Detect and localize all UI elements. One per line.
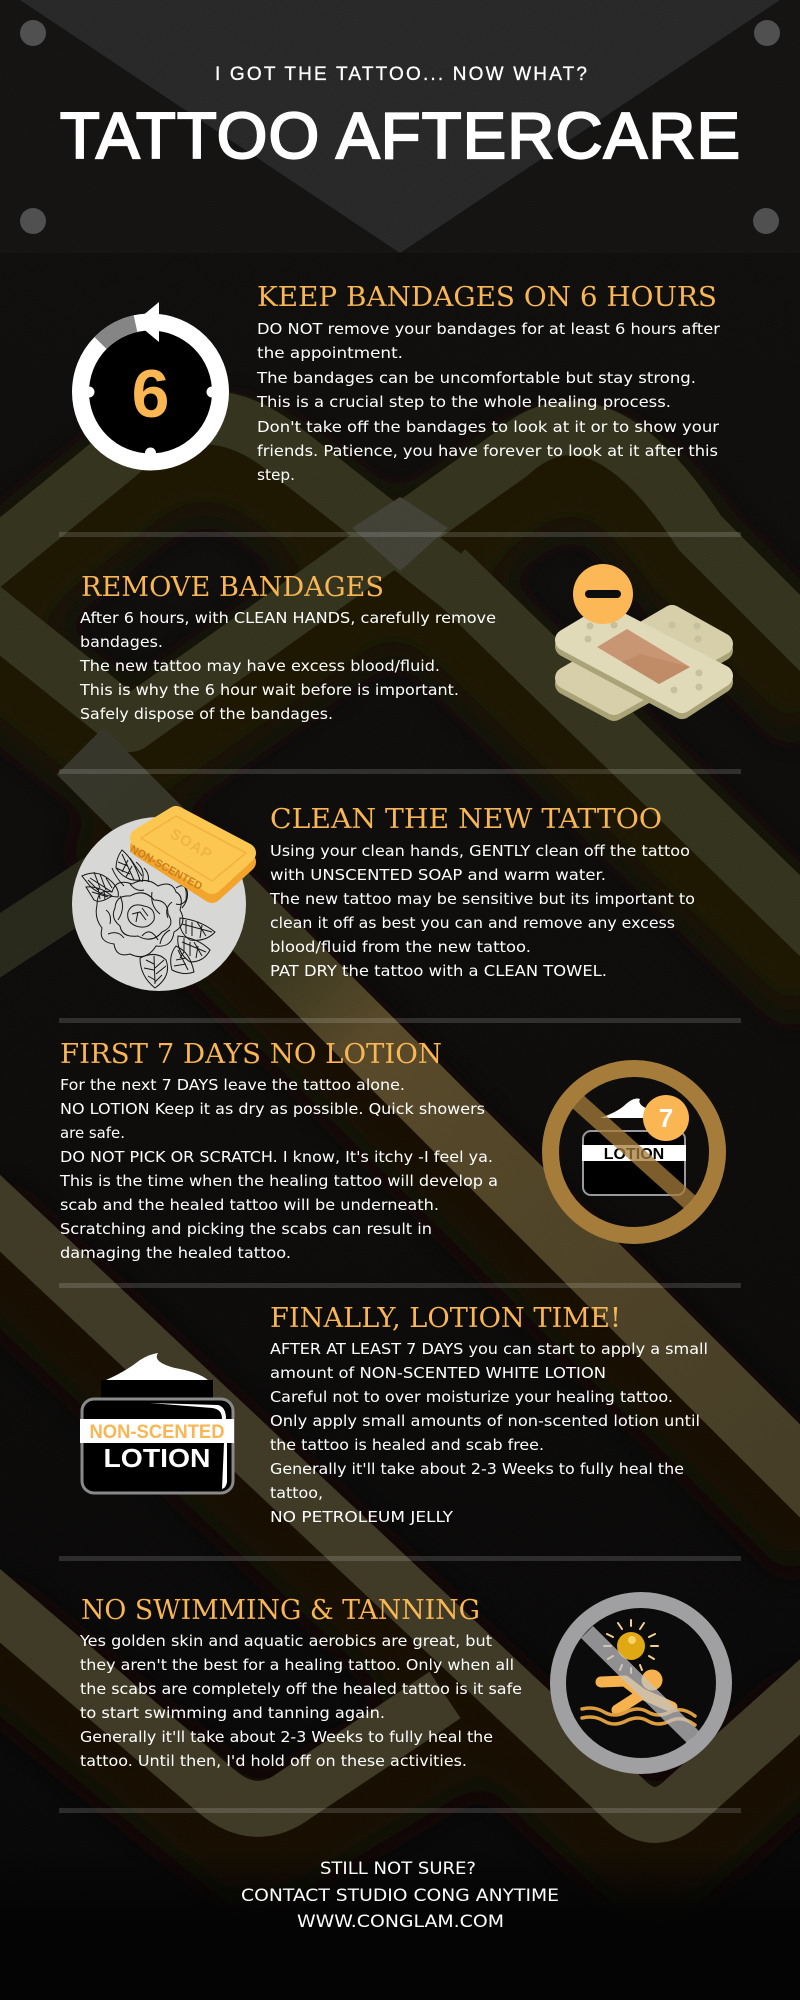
footer: contact text — [241, 1859, 559, 1932]
body text: Yes golden skin and aquatic aerobics are great, but — [79, 1632, 492, 1650]
body text: For the next 7 DAYS leave the tattoo alone. — [60, 1076, 405, 1094]
body text: NO PETROLEUM JELLY — [270, 1508, 454, 1526]
footer: contact text: CONTACT STUDIO CONG ANYTIME — [241, 1886, 559, 1906]
body text: are safe. — [60, 1124, 125, 1142]
body text: PAT DRY the tattoo with a CLEAN TOWEL. — [270, 962, 607, 980]
icon: no lotion sign — [550, 1068, 718, 1236]
body text: with UNSCENTED SOAP and warm water. — [270, 866, 606, 884]
body text: After 6 hours, with CLEAN HANDS, carefully remove — [80, 609, 496, 627]
heading: REMOVE BANDAGES — [81, 572, 384, 603]
body text: Don't take off the bandages to look at it or to show your — [257, 418, 720, 436]
divider — [59, 1018, 741, 1023]
heading: CLEAN THE NEW TATTOO — [270, 804, 662, 835]
icon: no lotion sign: LOTION — [604, 1146, 664, 1163]
body text: clean it off as best you can and remove any excess — [270, 914, 675, 932]
body text: to start swimming and tanning again. — [80, 1704, 385, 1722]
body text: friends. Patience, you have forever to look at it after this — [257, 442, 718, 460]
body text: Generally it'll take about 2-3 Weeks to fully heal the — [80, 1728, 493, 1746]
panel: no swimming and tanning — [79, 1595, 724, 1770]
icon: soap bar: SOAP — [167, 825, 216, 864]
heading: NO SWIMMING & TANNING — [81, 1595, 480, 1626]
body text: Using your clean hands, GENTLY clean off the tattoo — [270, 842, 690, 860]
body text: The bandages can be uncomfortable but stay strong. — [256, 369, 696, 387]
body text — [79, 609, 496, 723]
icon: crossed bandages — [566, 564, 722, 710]
icon: six hour clock: 6 — [132, 356, 169, 432]
body text: This is why the 6 hour wait before is important. — [79, 681, 459, 699]
icon: lotion jar — [80, 1353, 234, 1493]
body text: tattoo, — [270, 1484, 323, 1502]
icon: soap bar: NON-SCENTED — [128, 843, 204, 893]
body text: Generally it'll take about 2-3 Weeks to fully heal the — [270, 1460, 684, 1478]
heading: FINALLY, LOTION TIME! — [270, 1303, 621, 1334]
body text: the appointment. — [257, 344, 403, 362]
body text: The new tattoo may have excess blood/fluid. — [79, 657, 440, 675]
divider — [59, 1556, 741, 1561]
background: header block — [0, 0, 800, 253]
icon: lotion jar: LOTION — [104, 1443, 210, 1473]
body text: the scabs are completely off the healed tattoo is it safe — [80, 1680, 522, 1698]
icon: six hour clock — [80, 302, 220, 462]
body text — [59, 1076, 498, 1262]
icon: lotion jar: NON-SCENTED — [90, 1422, 224, 1443]
title: TATTOO AFTERCARE — [60, 99, 740, 172]
body text: NO LOTION Keep it as dry as possible. Quick showers — [60, 1100, 485, 1118]
heading: KEEP BANDAGES ON 6 HOURS — [257, 282, 717, 313]
decorative rivets — [20, 20, 780, 234]
body text: The new tattoo may be sensitive but its important to — [269, 890, 695, 908]
peony line drawing — [82, 850, 215, 988]
panel: remove bandages — [79, 564, 722, 723]
body text: AFTER AT LEAST 7 DAYS you can start to apply a small — [270, 1340, 708, 1358]
background: header triangle — [20, 0, 780, 253]
icon: no lotion sign: 7 — [659, 1103, 673, 1133]
panel: first 7 days no lotion — [59, 1039, 718, 1262]
footer: contact text: STILL NOT SURE? — [320, 1859, 476, 1879]
body text: amount of NON-SCENTED WHITE LOTION — [270, 1364, 606, 1382]
divider — [59, 1808, 741, 1813]
body text: Careful not to over moisturize your healing tattoo. — [270, 1388, 673, 1406]
body text: This is the time when the healing tattoo will develop a — [59, 1172, 498, 1190]
body text: bandages. — [80, 633, 163, 651]
body text — [79, 1632, 522, 1770]
body text — [269, 842, 695, 980]
divider — [59, 1283, 741, 1288]
background: lighter crossing diamond — [352, 497, 448, 571]
body text: step. — [257, 466, 295, 484]
body text — [270, 1340, 708, 1526]
body text — [256, 320, 721, 484]
footer: contact text: WWW.CONGLAM.COM — [297, 1912, 504, 1932]
divider — [59, 532, 741, 537]
panel: finally lotion time — [80, 1303, 708, 1526]
body text: Only apply small amounts of non-scented lotion until — [270, 1412, 700, 1430]
background: blurred brown band shadows — [0, 458, 800, 1868]
body text: damaging the healed tattoo. — [60, 1244, 291, 1262]
body text: This is a crucial step to the whole healing process. — [256, 393, 671, 411]
body text: they aren't the best for a healing tattoo. Only when all — [80, 1656, 514, 1674]
body text: DO NOT PICK OR SCRATCH. I know, It's itchy -I feel ya. — [60, 1148, 493, 1166]
body text: tattoo. Until then, I'd hold off on these activities. — [80, 1752, 467, 1770]
divider — [59, 769, 741, 774]
body text: Safely dispose of the bandages. — [80, 705, 333, 723]
panel: keep bandages on — [80, 282, 721, 484]
body text: blood/fluid from the new tattoo. — [270, 938, 531, 956]
heading: FIRST 7 DAYS NO LOTION — [60, 1039, 442, 1070]
background: bottom fade — [0, 1850, 800, 2000]
body text: DO NOT remove your bandages for at least 6 hours after — [257, 320, 721, 338]
body text: Scratching and picking the scabs can result in — [60, 1220, 432, 1238]
background: interlaced olive bands — [0, 418, 800, 1501]
icon: skin circle with peony and soap — [72, 816, 246, 991]
icon: soap bar — [128, 816, 246, 893]
body text: the tattoo is healed and scab free. — [270, 1436, 544, 1454]
body text: scab and the healed tattoo will be underneath. — [60, 1196, 439, 1214]
subtitle: I GOT THE TATTOO... NOW WHAT? — [215, 64, 587, 85]
icon: no swimming or tanning sign — [558, 1600, 724, 1766]
panel: clean the new tattoo — [72, 804, 695, 991]
